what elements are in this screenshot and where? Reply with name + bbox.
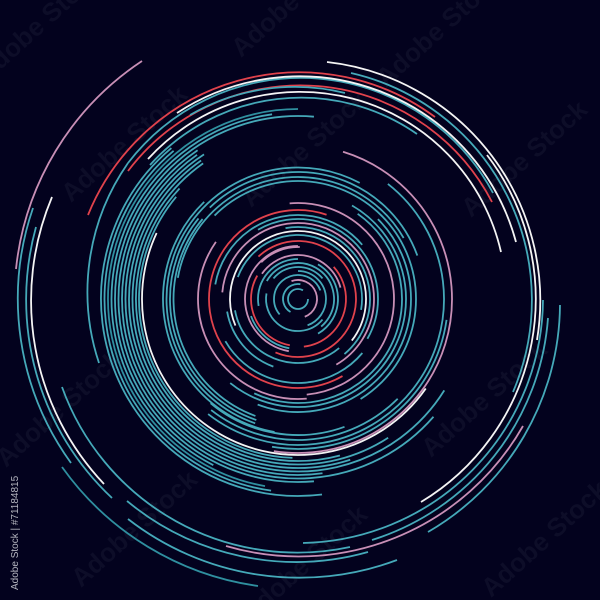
credit line: Adobe Stock | #71184815 [10, 475, 21, 590]
band: inner mixed rings [176, 177, 420, 421]
watermark texts: Adobe Stock [65, 464, 203, 593]
band: middle teal rings [118, 119, 478, 479]
watermark texts: Adobe Stock [55, 79, 193, 208]
band: large teal rings [45, 46, 551, 552]
concentric ring bands [45, 46, 551, 552]
outer arcs [16, 61, 560, 586]
watermark texts: Adobe Stock [415, 334, 553, 463]
watermark texts: Adobe Stock [455, 94, 593, 223]
watermark texts: Adobe Stock [235, 84, 373, 213]
